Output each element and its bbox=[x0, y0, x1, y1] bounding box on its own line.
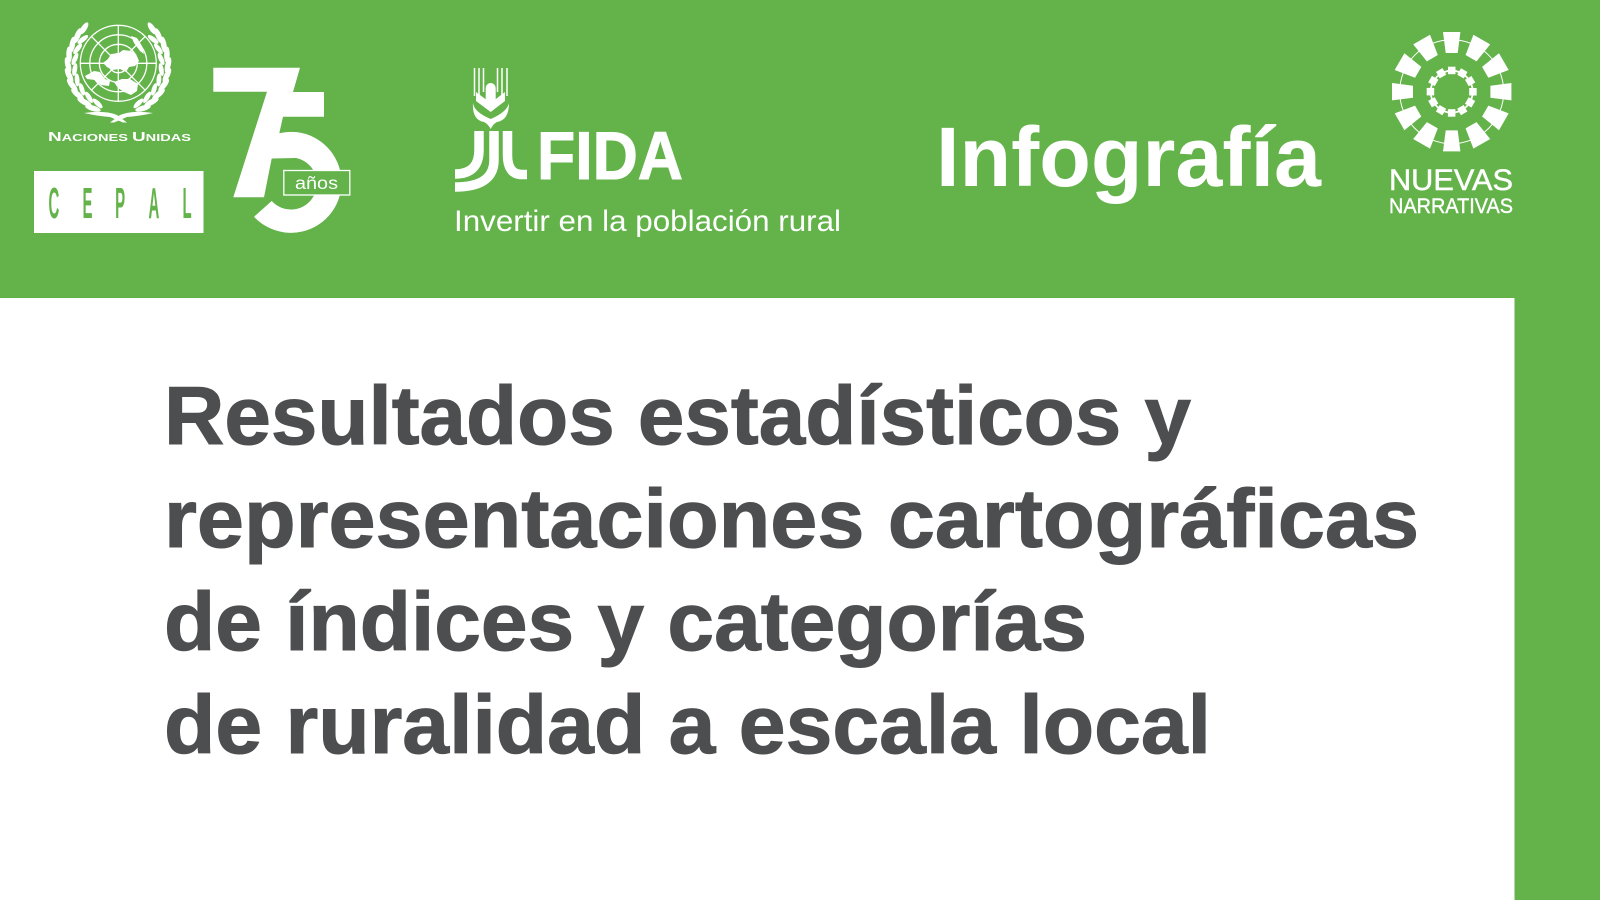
heading: Infografía: Infografía bbox=[936, 110, 1322, 204]
logo: Naciones Unidas emblem bbox=[63, 21, 173, 123]
crossed ribbons bbox=[84, 112, 127, 122]
text: Naciones Unidas: N ACIONES U NIDAS bbox=[48, 129, 191, 144]
title: de índices y categorías bbox=[164, 575, 1087, 668]
logo: CEPAL box bbox=[34, 171, 204, 233]
title: Resultados estadísticos y bbox=[164, 369, 1191, 462]
inner wreath leaves, right bbox=[132, 34, 166, 110]
logo: 75 años: años bbox=[295, 173, 338, 193]
outer wreath leaves, right bbox=[135, 21, 173, 113]
logo: Nuevas Narrativas ring bbox=[1392, 32, 1511, 151]
logo: FIDA wheat symbol bbox=[455, 68, 527, 187]
text: Nuevas: NUEVAS bbox=[1389, 164, 1513, 197]
text: FIDA: FIDA bbox=[537, 118, 683, 194]
inner wreath leaves, left bbox=[70, 34, 104, 110]
white content panel bbox=[0, 298, 1514, 900]
title bbox=[164, 369, 1419, 771]
text: tagline: Invertir en la población rural bbox=[454, 205, 841, 238]
text: Narrativas: NARRATIVAS bbox=[1389, 195, 1513, 218]
logo: CEPAL box: CEPAL bbox=[48, 178, 192, 227]
title: representaciones cartográficas bbox=[164, 472, 1419, 565]
title: de ruralidad a escala local bbox=[164, 678, 1211, 771]
logo: 75 años bbox=[213, 68, 350, 233]
outer wreath leaves, left bbox=[63, 21, 101, 113]
